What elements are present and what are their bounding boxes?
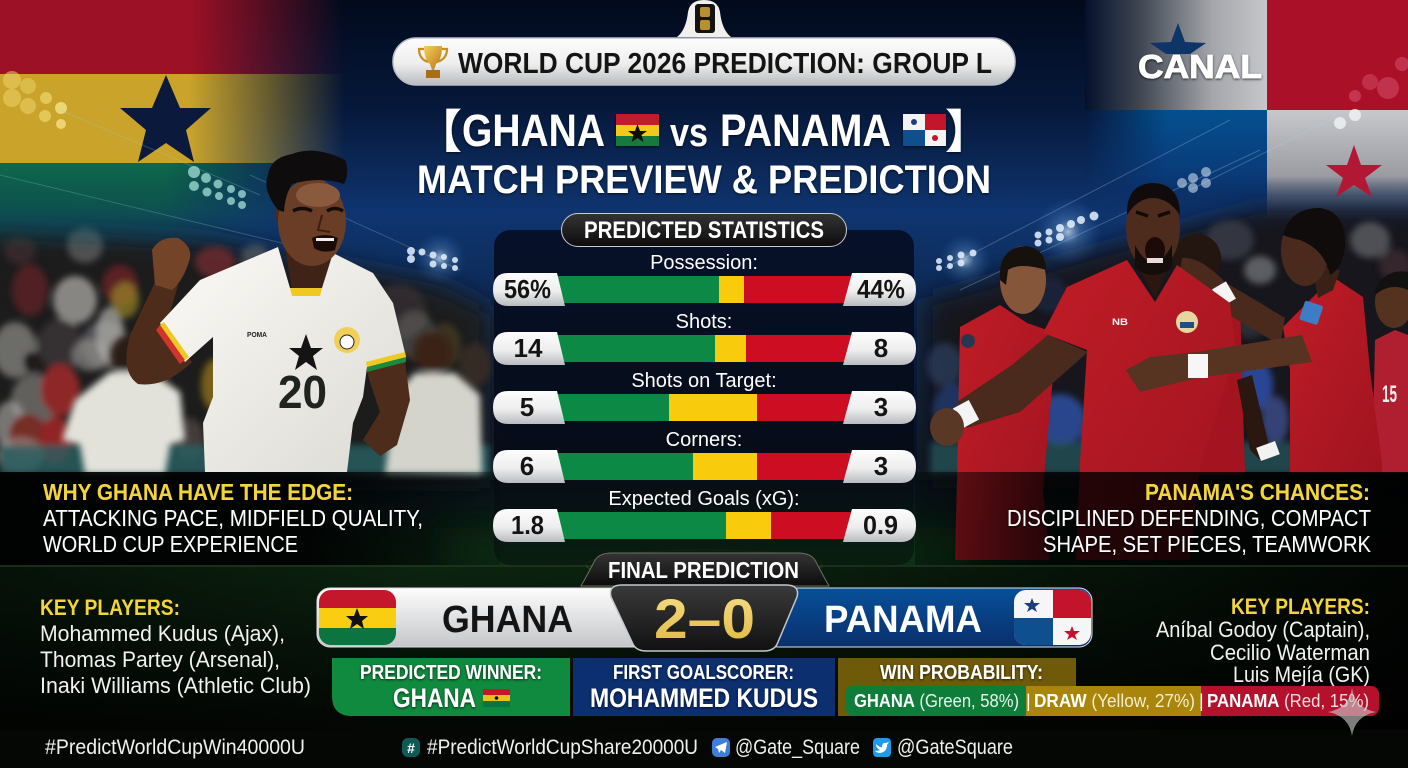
title banner — [393, 38, 1015, 85]
panel: predicted statistics — [493, 214, 916, 565]
right teammate — [1283, 277, 1382, 474]
light cluster: centre left — [414, 232, 466, 284]
icon: Ghana flag — [319, 590, 396, 645]
match heading: PANAMA — [720, 105, 891, 156]
box: first goalscorer: MOHAMMED KUDUS — [590, 683, 818, 713]
player: Panama teammates: 15 — [1382, 381, 1397, 408]
stat: possession: 44% — [857, 274, 905, 304]
raised arm and fist — [126, 278, 192, 385]
footer: #PredictWorldCupWin40000U — [45, 736, 305, 759]
text block: Panama key players: Luis Mejía (GK) — [1233, 662, 1370, 687]
text block: Ghana key players: KEY PLAYERS: — [40, 595, 180, 620]
bar: probability split: GHANA (Green, 58%) — [854, 691, 1019, 711]
stat: shots on target — [493, 370, 916, 424]
logo: CANAL: CANAL — [1138, 48, 1262, 85]
player: Panama main: NB — [1112, 317, 1129, 327]
bar: probability split: DRAW (Yellow, 27%) — [1034, 691, 1195, 711]
Panama flag backdrop — [1085, 0, 1408, 220]
jersey — [160, 247, 406, 472]
bar: probability split: PANAMA (Red, 15%) — [1207, 691, 1369, 711]
stat: corners — [493, 429, 916, 483]
teammate behind — [1173, 234, 1221, 282]
match heading: 】 — [945, 106, 991, 158]
stat: shots — [493, 311, 916, 365]
score — [610, 585, 798, 651]
sleeve stripes — [156, 325, 185, 364]
raised arm of teammate — [1180, 258, 1285, 345]
icon: hashtag: # — [407, 740, 415, 756]
box: predicted winner — [332, 658, 570, 716]
text block: Ghana key players: Inaki Williams (Athletic Club) — [40, 673, 311, 698]
Panama side — [765, 588, 1092, 647]
box: win probability: WIN PROBABILITY: — [880, 662, 1043, 684]
score: 2–0 — [654, 587, 755, 650]
icon: Ghana flag — [483, 689, 510, 707]
stat: shots on target: 5 — [520, 392, 534, 422]
bar: probability split — [845, 686, 1379, 716]
box: first goalscorer: FIRST GOALSCORER: — [613, 662, 794, 684]
star, crest and number — [289, 334, 323, 370]
Ghana side — [317, 588, 647, 647]
light cluster: top right — [1177, 167, 1211, 193]
box: predicted winner: PREDICTED WINNER: — [360, 662, 542, 684]
player: Ghana number 20 — [126, 151, 410, 472]
icon: Panama flag — [903, 114, 946, 146]
text block: Panama's chances — [1007, 479, 1372, 557]
lower band — [0, 550, 1408, 768]
match heading: 【 — [416, 106, 462, 158]
player: Panama teammates — [955, 208, 1408, 560]
stat: shots on target: Shots on Target: — [631, 370, 777, 392]
stat: possession: 56% — [504, 274, 551, 304]
outstretched arm — [957, 335, 1088, 428]
text block: Panama key players — [1156, 594, 1370, 687]
light cluster: upper left — [188, 166, 246, 209]
hair — [266, 151, 347, 212]
stat: shots: 14 — [514, 333, 543, 363]
stat: expected goals: Expected Goals (xG): — [608, 488, 800, 510]
match heading: vs — [670, 111, 708, 155]
player: Ghana number 20: POMA — [247, 332, 267, 339]
box: first goalscorer — [573, 658, 835, 716]
Panama side: PANAMA — [824, 599, 982, 641]
logo: CANAL — [1138, 23, 1262, 85]
match subheading: MATCH PREVIEW & PREDICTION — [417, 158, 991, 202]
face features — [293, 208, 343, 211]
head — [1132, 255, 1174, 298]
heading: predicted statistics: PREDICTED STATISTICS — [584, 217, 824, 244]
Ghana flag backdrop — [0, 0, 345, 253]
text block: Ghana key players — [40, 595, 311, 698]
final prediction tab — [581, 553, 829, 586]
stat: shots on target: 3 — [874, 392, 888, 422]
icon: hashtag — [402, 738, 420, 757]
stat: expected goals: 0.9 — [863, 510, 898, 540]
blurred Ghana teammates — [62, 332, 482, 474]
text block: Panama key players: Cecilio Waterman — [1210, 640, 1370, 665]
teammate's arm over chest — [1126, 335, 1312, 392]
text block: Panama key players: Aníbal Godoy (Captain), — [1156, 617, 1370, 642]
footer: #PredictWorldCupShare20000U — [427, 736, 698, 759]
watermark: sparkle — [1328, 688, 1376, 736]
text block: Ghana key players: Mohammed Kudus (Ajax), — [40, 621, 285, 646]
lowered arm and hand — [363, 362, 410, 456]
match heading: GHANA — [462, 105, 605, 156]
icon: telegram — [712, 738, 730, 757]
scoreboard — [317, 585, 1092, 651]
head — [275, 204, 287, 224]
text block: why Ghana have the edge — [43, 479, 423, 557]
text block: why Ghana have the edge: ATTACKING PACE, MIDFIELD QUALITY, — [43, 505, 423, 531]
logo tab — [677, 0, 731, 37]
stadium floodlights — [0, 110, 1340, 290]
Ghana side: GHANA — [442, 599, 573, 641]
bar: probability split: | — [1199, 691, 1204, 711]
stat: expected goals — [493, 488, 916, 542]
stat: shots: Shots: — [676, 311, 732, 333]
title banner: WORLD CUP 2026 PREDICTION: GROUP L — [458, 48, 992, 80]
player: Panama main — [930, 183, 1312, 560]
light cluster: upper right — [1034, 198, 1102, 266]
text block: Ghana key players: Thomas Partey (Arsenal), — [40, 647, 280, 672]
final prediction tab: FINAL PREDICTION — [608, 557, 799, 583]
light cluster: centre right — [939, 234, 991, 286]
stat: corners: 6 — [520, 451, 534, 481]
far right teammate — [1372, 330, 1408, 474]
crowd: left stands — [0, 227, 491, 475]
box: predicted winner: GHANA — [393, 683, 476, 713]
stat: corners: 3 — [874, 451, 888, 481]
text block: Panama's chances: SHAPE, SET PIECES, TEAMWORK — [1043, 531, 1372, 557]
badge — [1176, 311, 1198, 333]
bar: probability split: | — [1026, 691, 1031, 711]
stat: possession — [493, 252, 916, 306]
icon: Panama flag — [1014, 590, 1091, 645]
box: win probability — [838, 658, 1379, 716]
icon: Ghana flag — [616, 114, 659, 146]
neck — [283, 235, 337, 290]
text block: Panama's chances: DISCIPLINED DEFENDING, COMPACT — [1007, 505, 1371, 531]
stat: corners: Corners: — [666, 429, 742, 451]
text block: Panama key players: KEY PLAYERS: — [1231, 594, 1370, 619]
footer: @GateSquare — [897, 736, 1013, 759]
text block: why Ghana have the edge: WHY GHANA HAVE THE EDGE: — [43, 479, 353, 505]
player: Ghana number 20: 20 — [278, 366, 327, 418]
footer: @Gate_Square — [735, 736, 860, 759]
jersey and shorts — [1043, 260, 1235, 560]
left teammate — [955, 305, 1053, 560]
icon: trophy — [419, 46, 447, 78]
stat: expected goals: 1.8 — [511, 510, 544, 540]
text block: Panama's chances: PANAMA'S CHANCES: — [1145, 479, 1370, 505]
text block: why Ghana have the edge: WORLD CUP EXPERIENCE — [43, 531, 298, 557]
stat: possession: Possession: — [650, 252, 758, 274]
text panel overlays — [0, 472, 1408, 567]
crowd: right stands — [927, 220, 1408, 474]
match heading — [416, 105, 991, 158]
stat: shots: 8 — [874, 333, 888, 363]
footer — [45, 736, 1013, 759]
icon: twitter — [873, 738, 891, 757]
